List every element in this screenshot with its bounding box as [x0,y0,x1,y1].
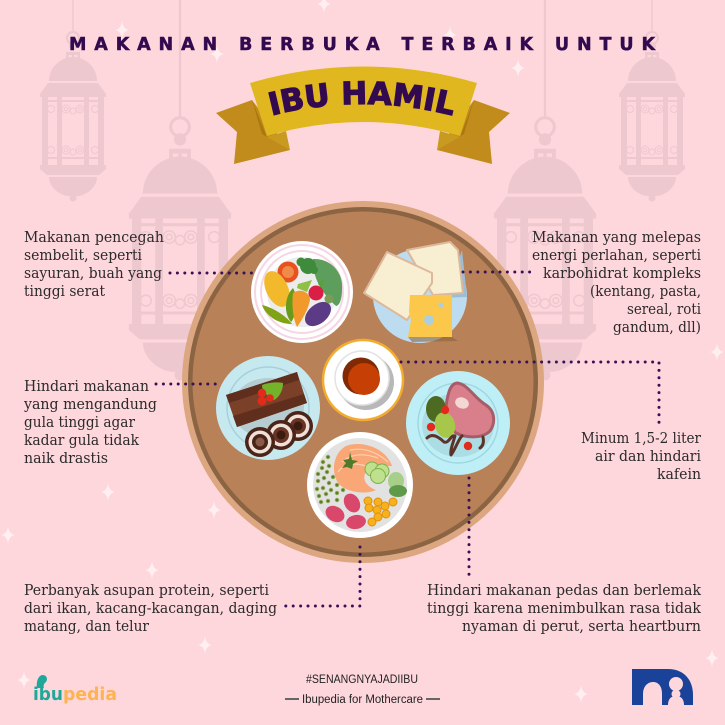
text: complex carbohydrates: sereal, roti [627,300,701,318]
text: water [581,429,702,483]
text: fibre foods: tinggi serat [24,282,105,300]
text: complex carbohydrates: (kentang, pasta, [590,282,701,300]
plate: bread and cheese [364,242,467,343]
text: protein: dari ikan, kacang-kacangan, daging [24,599,277,617]
ribbon banner [216,66,510,164]
lantern: small left [40,0,106,202]
text: spicy and fatty [427,581,702,635]
text: spicy and fatty: tinggi karena menimbulkan rasa tidak [427,599,702,617]
text: avoid sugar: yang mengandung [23,395,157,413]
text: avoid sugar [23,377,157,467]
plate: cup of tea [323,340,403,420]
text: avoid sugar: naik drastis [24,449,108,467]
text: avoid sugar: Hindari makanan [24,377,149,395]
text: complex carbohydrates: karbohidrat kompleks [543,264,701,282]
lantern: large right [494,0,596,380]
text: protein: Perbanyak asupan protein, seperti [24,581,269,599]
wooden tray [182,201,544,563]
credit line: Ibupedia for Mothercare [302,694,423,706]
text: fibre foods: sembelit, seperti [24,246,142,264]
lantern: small right [619,0,685,202]
text: protein: matang, dan telur [24,617,150,635]
text: protein [24,581,277,635]
text: complex carbohydrates: energi perlahan, seperti [532,246,701,264]
plate: cake [216,356,320,460]
text: spicy and fatty: nyaman di perut, serta heartburn [462,617,701,635]
text: fibre foods: Makanan pencegah [24,228,164,246]
logo: ibupedia: ibu [33,684,63,705]
plate: fish, peas, vegetables [307,432,413,538]
text: spicy and fatty: Hindari makanan pedas dan berlemak [427,581,702,599]
text: water: Minum 1,5-2 liter [581,429,702,447]
text: water: air dan hindari [595,447,701,465]
text: avoid sugar: gula tinggi agar [24,413,136,431]
dotted connectors [156,272,659,606]
plate: meat [406,371,510,475]
title line: MAKANAN BERBUKA TERBAIK UNTUK [69,35,656,55]
text: avoid sugar: kadar gula tidak [24,431,140,449]
text: fibre foods: sayuran, buah yang [24,264,162,282]
logo: mothercare [632,669,693,705]
text: complex carbohydrates: gandum, dll) [613,318,701,336]
logo: ibupedia [33,675,117,705]
text: complex carbohydrates [532,228,701,336]
text: fibre foods [24,228,164,300]
hashtag: #SENANGNYAJADIIBU [306,674,418,686]
text: water: kafein [657,465,701,483]
text: complex carbohydrates: Makanan yang melepas [532,228,701,246]
lantern: large left [129,0,231,380]
plate: vegetables [251,241,353,343]
logo: ibupedia: pedia [63,684,117,705]
banner title: IBU HAMIL [268,80,454,116]
